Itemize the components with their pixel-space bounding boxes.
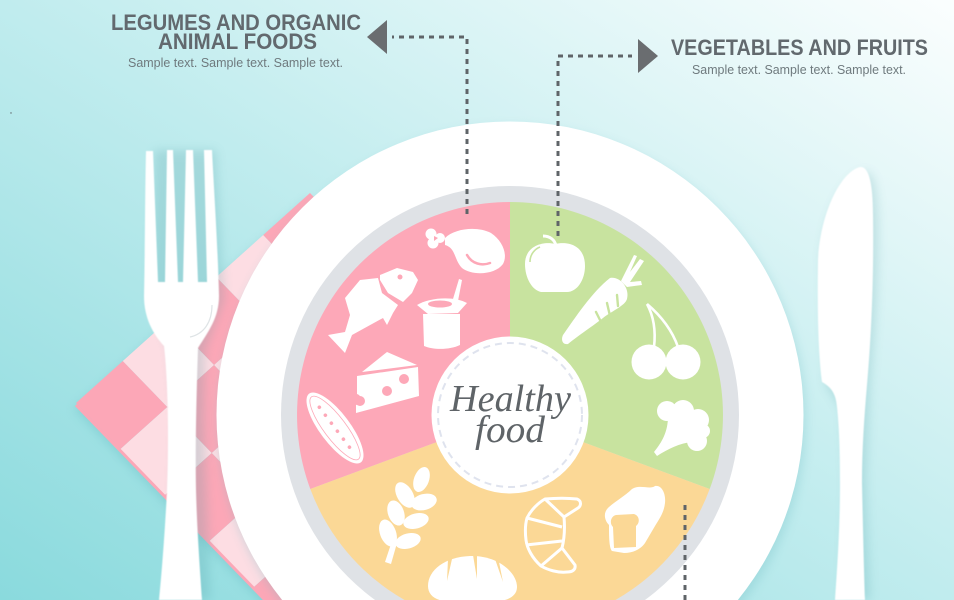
heading: legumes and organic animal foods: LEGUMES AND ORGANIC: [111, 10, 361, 35]
arrow: grains connector: [684, 505, 686, 600]
icon: croissant: [525, 498, 580, 572]
heading: legumes and organic animal foods: [111, 10, 361, 54]
icon: cherries: [632, 304, 700, 380]
arrow: vegetables connector: [558, 39, 658, 236]
icon: carrot: [562, 255, 644, 344]
speck: [10, 112, 12, 114]
icon: bread loaf: [428, 555, 517, 600]
text: vegetables caption: Sample text. Sample text. Sample text.: [692, 63, 906, 77]
knife: [818, 167, 878, 600]
plate: [216, 122, 806, 600]
icon: chicken leg: [426, 228, 505, 273]
arrow: legumes connector: [367, 20, 467, 214]
text: legumes caption: Sample text. Sample text. Sample text.: [128, 56, 343, 70]
food wheel segments: [297, 202, 723, 600]
heading: vegetables and fruits: VEGETABLES AND FRUITS: [671, 35, 928, 60]
center badge: healthy food: food: [475, 409, 546, 451]
icon: cheese: [355, 352, 419, 413]
icon: yogurt cup: [417, 279, 467, 349]
napkin: [74, 193, 538, 600]
heading: legumes and organic animal foods: ANIMAL FOODS: [158, 29, 317, 54]
fork: [144, 150, 224, 600]
icon: broccoli: [654, 400, 710, 456]
center badge: healthy food: Healthy: [449, 378, 571, 420]
center badge: healthy food: [432, 336, 588, 494]
icon: pea pod: [297, 385, 373, 471]
icon: bread slice: [605, 486, 665, 553]
icon: apple: [525, 236, 585, 292]
icon: wheat: [376, 465, 439, 564]
icon: fish: [328, 268, 418, 353]
